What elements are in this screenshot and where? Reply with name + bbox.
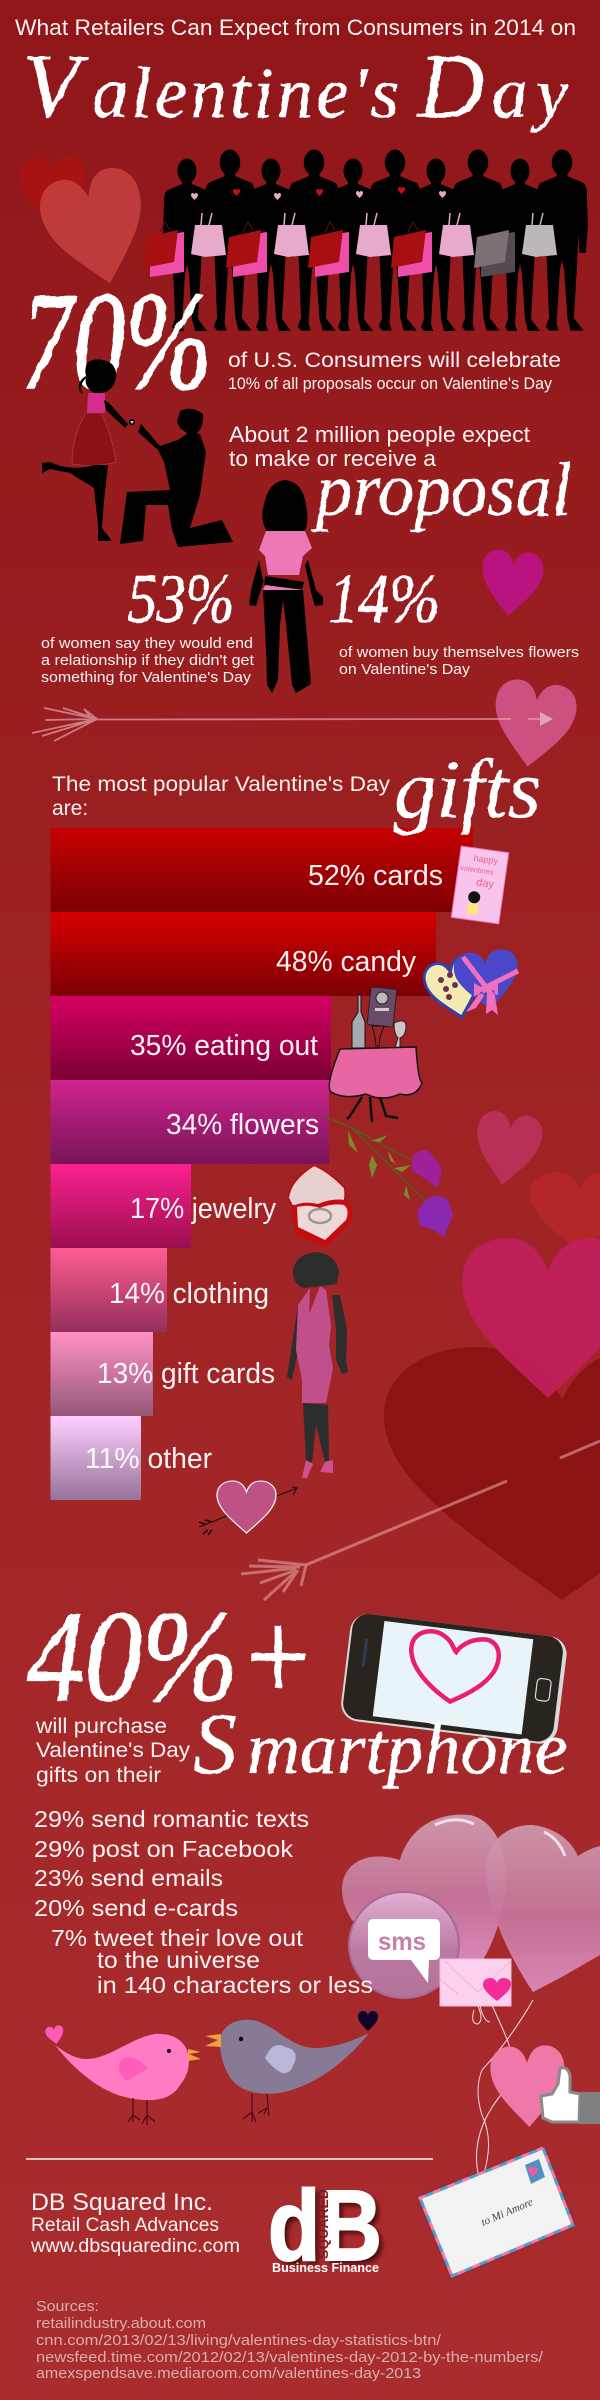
icon: sms bubble (349, 1892, 459, 1998)
stat: 70%: 70% (21, 264, 212, 419)
sources (36, 2299, 544, 2382)
title script: Valentine's Day: V (23, 35, 89, 137)
text: consumers celebrate (228, 349, 561, 393)
divider (26, 2158, 433, 2160)
logo: dB Squared Business Finance: SQUARED (315, 2189, 331, 2259)
text: will purchase (35, 1715, 191, 1787)
logo: dB Squared Business Finance: dB (268, 2170, 382, 2282)
icon: magenta heart (478, 548, 545, 619)
bar: candy (50, 912, 436, 996)
heading: most popular gifts: The most popular Valentine's Day (52, 773, 391, 796)
list: smartphone activities: to the universe (97, 1947, 260, 1973)
list: smartphone activities: 7% tweet their love out (51, 1925, 304, 1951)
text: women end relationship: something for Valentine's Day (41, 670, 252, 686)
icon: sms bubble: sms (378, 1928, 426, 1956)
company contact text (30, 2189, 240, 2257)
text: women end relationship: of women say they would end (41, 636, 253, 652)
text: 2 million proposal: to make or receive a (229, 446, 437, 471)
text: will purchase: Valentine's Day (36, 1739, 191, 1762)
icon: ring box (288, 1165, 353, 1248)
script heading: gifts: gifts (394, 743, 541, 836)
list: smartphone activities: 29% send romantic texts (34, 1806, 309, 1832)
icon: valentine card (451, 846, 509, 924)
logo: dB Squared Business Finance: dB (272, 2174, 386, 2286)
company contact text: Retail Cash Advances (31, 2214, 219, 2236)
text: will purchase: gifts on their (36, 1764, 161, 1787)
logo: dB Squared Business Finance: Business Finance (272, 2260, 379, 2275)
text: women buy flowers (339, 645, 579, 678)
bar: other (50, 1416, 212, 1500)
bar: flowers: 34% flowers (166, 1109, 319, 1141)
text: women end relationship: a relationship if they didn't get (41, 653, 254, 669)
text: women buy flowers: on Valentine's Day (339, 662, 471, 678)
title script: Valentine's Day: D (416, 35, 484, 137)
bar: candy: 48% candy (276, 946, 416, 978)
big background arrow (241, 1441, 600, 1600)
company contact text: www.dbsquaredinc.com (30, 2235, 240, 2257)
icon: standing woman pink top (249, 480, 323, 693)
icon: heart balloons (342, 1815, 600, 1992)
bar: eating out: 35% eating out (130, 1030, 318, 1062)
icon: heart with facebook thumbs-up (490, 2045, 600, 2128)
icon: pink bird (45, 2025, 201, 2125)
text: women buy flowers: of women buy themselves flowers (339, 645, 579, 661)
stat: 53%: 53% (128, 561, 234, 638)
bar: gift cards: 13% gift cards (97, 1358, 275, 1390)
icon: arrow through heart (32, 677, 579, 772)
list: smartphone activities (34, 1806, 373, 1998)
text: consumers celebrate: of U.S. Consumers will celebrate (228, 349, 561, 372)
bar: jewelry: 17% jewelry (130, 1193, 276, 1225)
list: smartphone activities: in 140 characters or less (97, 1972, 373, 1998)
bar: clothing: 14% clothing (109, 1278, 269, 1310)
company contact text: DB Squared Inc. (31, 2189, 213, 2216)
bar: cards: 52% cards (308, 860, 443, 892)
background hearts lower right (384, 1109, 600, 1600)
icon: woman in pink dress (287, 1252, 348, 1478)
icon: valentine card: day (475, 877, 495, 891)
sources: cnn.com/2013/02/13/living/valentines-day-statistics-btn/ (36, 2333, 442, 2349)
script heading: proposal: proposal (311, 448, 572, 532)
bar: cards (50, 828, 473, 912)
bar: clothing (50, 1248, 269, 1332)
men silhouettes with shopping bags (143, 149, 588, 331)
text: will purchase: will purchase (35, 1715, 167, 1738)
bar: flowers (50, 1080, 329, 1164)
text: 2 million proposal: About 2 million people expect (229, 422, 530, 447)
title subtitle: What Retailers Can Expect from Consumers in 2014 on (15, 15, 576, 40)
decorative hearts upper left (19, 155, 159, 295)
list: smartphone activities: 23% send emails (34, 1865, 223, 1891)
icon: heart chocolate box (421, 948, 522, 1024)
text: consumers celebrate: 10% of all proposals occur on Valentine's Day (228, 375, 553, 393)
sources: Sources: (36, 2299, 99, 2315)
sources: amexspendsave.mediaroom.com/valentines-day-2013 (36, 2366, 421, 2382)
sources: newsfeed.time.com/2012/02/13/valentines-day-2012-by-the-numbers/ (36, 2350, 544, 2366)
icon: gray bird (205, 2011, 378, 2122)
stat: 14%: 14% (328, 561, 440, 638)
title script: Valentine's Day: alentine's (92, 53, 402, 133)
text: 2 million proposal (229, 422, 530, 471)
stat: 40%+: 40%+ (27, 1585, 316, 1729)
icon: woman and kneeling man proposing (42, 359, 233, 547)
bar: other: 11% other (85, 1443, 212, 1475)
sources: retailindustry.about.com (36, 2316, 206, 2332)
text: women end relationship (41, 636, 254, 686)
icon: smartphone with heart (339, 1612, 569, 1746)
bar chart: gifts (50, 828, 473, 1500)
strings and envelope letter: to Mi Amore (479, 2196, 535, 2229)
script heading: Smartphone: S (193, 1696, 237, 1793)
list: smartphone activities: 29% post on Facebook (34, 1836, 294, 1862)
bar: eating out (50, 996, 331, 1080)
icon: valentine card: valentines (460, 863, 495, 877)
icon: valentine card: happy (473, 853, 499, 866)
strings and envelope letter (420, 2000, 573, 2276)
icon: small pink envelope (440, 1959, 511, 2006)
list: smartphone activities: 20% send e-cards (34, 1895, 238, 1921)
heading: most popular gifts: are: (52, 797, 88, 820)
bar: gift cards (50, 1332, 275, 1416)
bar: jewelry (50, 1164, 276, 1248)
heading: most popular gifts (52, 773, 391, 820)
icon: roses (323, 1116, 453, 1237)
icon: heart with arrow (199, 1481, 297, 1535)
script heading: Smartphone: martphone (247, 1708, 568, 1789)
title script: Valentine's Day: ay (492, 53, 576, 133)
icon: restaurant table (329, 987, 422, 1122)
